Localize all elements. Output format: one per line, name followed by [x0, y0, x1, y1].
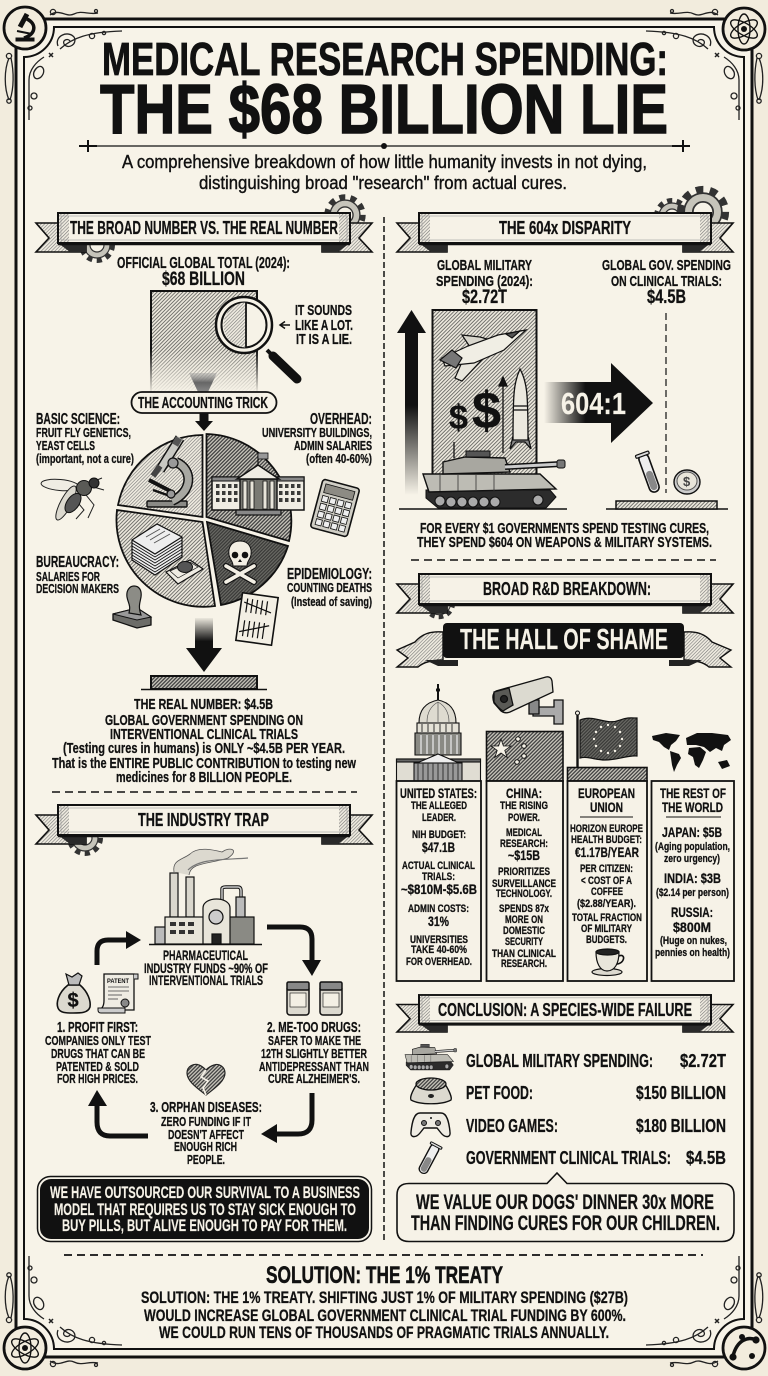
panel: european union: < COST OF A: [581, 875, 632, 887]
step 1 text: 1. PROFIT FIRST:: [57, 1020, 138, 1036]
icon: calculator: [310, 479, 360, 537]
icon: surveillance camera: [493, 677, 563, 724]
step 2 text: 12TH SLIGHTLY BETTER: [261, 1046, 367, 1061]
callout: basic science: BASIC SCIENCE:: [36, 411, 120, 428]
step 2 text: 2. ME-TOO DRUGS:: [267, 1020, 361, 1036]
icon: tally sheet: [236, 593, 278, 645]
arrow: 604 to 1 ratio: 604:1: [561, 386, 626, 421]
panel: european union: UNION: [590, 800, 623, 815]
icon: coin: $: [683, 474, 691, 489]
icon: dollar signs: $: [449, 399, 468, 437]
subtitle: A comprehensive breakdown of how little humanity invests in not dying,: [122, 151, 647, 172]
text block: the real number: [52, 697, 357, 786]
arrow: orphan diseases to profit: [88, 1090, 148, 1136]
text block: the real number: (Testing cures in humans) is ONLY ~$4.5B PER YEAR.: [63, 741, 345, 757]
step 3 text: DOESN'T AFFECT: [168, 1127, 244, 1142]
icon: patent scroll: [98, 974, 138, 1013]
icon: coin: [674, 470, 700, 494]
small arrows in military bar: [454, 377, 507, 458]
ground lines: [399, 508, 728, 510]
step 2 text: [259, 1020, 369, 1086]
panel: china: RESEARCH.: [501, 958, 547, 970]
heading: broad number vs real number: [36, 198, 372, 260]
text: pharmaceutical industry funds: [144, 948, 268, 988]
solution: SOLUTION: THE 1% TREATY: [266, 1262, 503, 1289]
callout: basic science: (important, not a cure): [36, 452, 134, 466]
panel: european union: OF MILITARY: [581, 923, 632, 935]
icon: broken heart: [187, 1064, 225, 1095]
bar: clinical trials: [616, 501, 717, 509]
icon: pill bottles: [287, 982, 342, 1015]
panel: china: CHINA:: [506, 786, 542, 801]
panel: european union: €1.17B/YEAR: [575, 844, 639, 860]
panel: china: SURVEILLANCE: [492, 878, 556, 890]
callout: dogs dinner: [397, 1173, 734, 1242]
arrow: industry to me-too drugs: [267, 927, 321, 976]
callout: overhead: (often 40-60%): [306, 452, 372, 466]
label: government clinical spending: ON CLINICAL TRIALS:: [611, 273, 722, 290]
panel: united states: ADMIN COSTS:: [408, 903, 469, 915]
panel: rest of the world: [652, 781, 734, 981]
pill: the accounting trick: [132, 392, 276, 413]
icon: patent scroll: PATENT: [107, 979, 129, 985]
panel: rest of the world: (Huge on nukes,: [660, 935, 727, 947]
icon: game controller: [411, 1113, 450, 1137]
step 1 text: FOR HIGH PRICES.: [57, 1071, 138, 1086]
heading: the 604x disparity: [397, 190, 733, 252]
panel: china: THAN CLINICAL: [492, 948, 556, 960]
panel: united states: [396, 781, 481, 981]
panel: china: [486, 781, 563, 981]
callout: bureaucracy: DECISION MAKERS: [36, 582, 119, 596]
arrow: profit to industry: [97, 931, 141, 965]
row: video games: VIDEO GAMES:: [466, 1116, 558, 1136]
arrow: big down: [186, 618, 222, 672]
panel: china: POWER.: [508, 812, 540, 824]
target line for clinical trials: [665, 313, 667, 493]
text: for every 1 dollar: [417, 520, 712, 551]
official total: [117, 255, 290, 290]
bar: military spending: [432, 310, 536, 478]
label: government clinical spending: $4.5B: [647, 287, 686, 308]
panel: china: MEDICAL: [506, 827, 542, 839]
label: global military spending: SPENDING (2024):: [436, 273, 533, 290]
callout: outsourced survival: WE HAVE OUTSOURCED OUR SURVIVAL TO A BUSINESS: [50, 1184, 360, 1202]
row: pet food: [466, 1083, 726, 1103]
row: pet food: PET FOOD:: [466, 1083, 533, 1103]
callout: overhead: OVERHEAD:: [310, 411, 372, 428]
callout: overhead: UNIVERSITY BUILDINGS,: [262, 426, 372, 440]
icon: dollar signs: [449, 382, 501, 440]
text block: the real number: GLOBAL GOVERNMENT SPENDING ON: [105, 713, 303, 729]
row: video games: $180 BILLION: [636, 1116, 726, 1136]
icon: coffee cup: [592, 949, 624, 976]
panel: united states: FOR OVERHEAD.: [406, 956, 472, 968]
step 3 text: ENOUGH RICH: [174, 1139, 237, 1154]
panel: china: DOMESTIC: [503, 925, 545, 937]
step 1 text: DRUGS THAT CAN BE: [51, 1046, 145, 1061]
icon: skull and crossbones: [226, 541, 254, 582]
icon: pharmaceutical factory: [149, 849, 262, 944]
icon: missile: [510, 369, 531, 449]
icon: money bag: $: [68, 990, 79, 1012]
pie chart: [116, 434, 291, 607]
text: pharmaceutical industry funds: INDUSTRY FUNDS ~90% OF: [144, 961, 268, 976]
heading: broad R&D breakdown: [397, 574, 733, 616]
icon: dollar signs: $: [472, 382, 501, 440]
heading: the industry trap: [36, 805, 372, 853]
icon: paper stack: [132, 524, 182, 575]
panel: rest of the world: pennies on health): [655, 947, 730, 959]
icon: fighter jet: [440, 330, 526, 381]
panel: china: SPENDS 87x: [499, 903, 550, 915]
arrow: up: [397, 310, 426, 495]
panel: china: TECHNOLOGY.: [496, 888, 552, 900]
pill: the accounting trick: THE ACCOUNTING TRICK: [138, 395, 269, 412]
panel: european union: PER CITIZEN:: [580, 863, 633, 875]
callout: sounds like a lot: IT SOUNDS: [295, 302, 352, 319]
panel: china: ~$15B: [508, 847, 540, 863]
icon: microscope: [147, 438, 188, 507]
step 2 text: ANTIDEPRESSANT THAN: [259, 1059, 369, 1074]
column divider: [383, 217, 385, 1240]
row: global military spending: GLOBAL MILITARY SPENDING:: [466, 1051, 653, 1071]
step 3 text: ZERO FUNDING IF IT: [161, 1114, 251, 1129]
callout: epidemiology: COUNTING DEATHS: [287, 581, 372, 595]
icon: small tank: [405, 1044, 457, 1070]
icon: atom medallion top: [723, 8, 765, 50]
heading: broad number vs real number: THE BROAD NUMBER VS. THE REAL NUMBER: [70, 217, 338, 238]
icon: EU flag: [576, 711, 637, 767]
subtitle: [122, 151, 647, 193]
callout: outsourced survival: [38, 1176, 372, 1242]
bar: 68 billion with fade: [149, 291, 259, 395]
callout: basic science: FRUIT FLY GENETICS,: [36, 426, 131, 440]
icon: atom medallion bottom: [4, 1327, 46, 1369]
callout: epidemiology: (Instead of saving): [291, 595, 372, 609]
label: global military spending: [436, 257, 533, 308]
panel: european union: TOTAL FRACTION: [572, 912, 642, 924]
callout: outsourced survival: BUY PILLS, BUT ALIVE ENOUGH TO PAY FOR THEM.: [62, 1217, 347, 1235]
panel: european union: EUROPEAN: [578, 786, 635, 801]
arrow: down to pie: [195, 413, 213, 431]
panel: european union: HORIZON EUROPE: [570, 823, 643, 835]
panel: united states: ACTUAL CLINICAL: [402, 860, 475, 872]
panel: rest of the world: $800M: [673, 919, 711, 935]
callout: basic science: YEAST CELLS: [36, 439, 95, 453]
icon: money bag: [57, 973, 90, 1013]
panel: united states: UNITED STATES:: [400, 786, 477, 801]
panel: european union: BUDGETS.: [586, 934, 627, 946]
step 3 text: 3. ORPHAN DISEASES:: [150, 1100, 262, 1116]
text: pharmaceutical industry funds: INTERVENTIONAL TRIALS: [149, 973, 263, 988]
panel: united states: $47.1B: [422, 839, 455, 855]
solution: WE COULD RUN TENS OF THOUSANDS OF PRAGMATIC TRIALS ANNUALLY.: [159, 1323, 609, 1342]
icon: world map: [652, 733, 731, 772]
step 1 text: COMPANIES ONLY TEST: [45, 1033, 151, 1048]
heading: the industry trap: THE INDUSTRY TRAP: [138, 809, 269, 830]
step 3 text: PEOPLE.: [187, 1152, 225, 1167]
callout: epidemiology: EPIDEMIOLOGY:: [287, 566, 372, 583]
panel: rest of the world: zero urgency): [664, 853, 720, 865]
subtitle: distinguishing broad "research" from actual cures.: [199, 172, 567, 193]
panel: china: THE RISING: [500, 800, 548, 812]
icon: small test tube: [416, 1142, 442, 1176]
panel: european union: HEALTH BUDGET:: [571, 834, 642, 846]
panel: united states: 31%: [428, 913, 449, 929]
icon: pet food bowl: [411, 1078, 451, 1104]
text block: the real number: INTERVENTIONAL CLINICAL TRIALS: [110, 727, 298, 743]
text: pharmaceutical industry funds: PHARMACEUTICAL: [163, 948, 248, 963]
icon: fruit fly: [41, 478, 104, 522]
panel: rest of the world: INDIA: $3B: [664, 870, 721, 886]
row: global military spending: $2.72T: [680, 1051, 726, 1071]
callout: sounds like a lot: [280, 302, 353, 348]
row: government clinical trials: $4.5B: [686, 1148, 726, 1168]
panel: china: MORE ON: [505, 914, 543, 926]
callout: bureaucracy: [36, 554, 119, 596]
arrow: 604 to 1 ratio: [544, 363, 653, 443]
row: video games: [466, 1116, 726, 1136]
callout: sounds like a lot: IT IS A LIE.: [296, 331, 352, 348]
heading banner: the hall of shame: THE HALL OF SHAME: [460, 624, 668, 656]
heading: conclusion: [397, 995, 733, 1032]
arrow: me-too drugs to orphan diseases: [261, 1093, 312, 1143]
row: government clinical trials: GOVERNMENT CLINICAL TRIALS:: [466, 1148, 671, 1168]
icon: main battle tank: [423, 451, 565, 508]
callout: overhead: [262, 411, 372, 466]
panel: rest of the world: THE REST OF: [660, 786, 726, 801]
step 3 text: [150, 1100, 262, 1167]
panel: european union: [568, 768, 647, 981]
panel: united states: LEADER.: [422, 812, 456, 824]
icon: US capitol: [396, 684, 480, 781]
icon: microscope medallion: [4, 7, 46, 49]
title: [100, 33, 668, 148]
row: pet food: $150 BILLION: [636, 1083, 726, 1103]
official total: $68 BILLION: [162, 268, 245, 290]
text block: the real number: medicines for 8 BILLION PEOPLE.: [116, 770, 292, 786]
callout: epidemiology: [287, 566, 372, 609]
callout: outsourced survival: MODEL THAT REQUIRES US TO STAY SICK ENOUGH TO: [54, 1201, 356, 1219]
icon: magnifying glass: [216, 297, 297, 379]
step 1 text: [45, 1020, 151, 1086]
heading banner: the hall of shame: [397, 623, 731, 667]
panel: rest of the world: JAPAN: $5B: [662, 824, 722, 840]
step 1 text: PATENTED & SOLD: [56, 1059, 139, 1074]
icon: stamp on pad: [166, 560, 203, 584]
icon: molecule medallion: [723, 1327, 765, 1369]
step 2 text: CURE ALZHEIMER'S.: [268, 1071, 360, 1086]
label: global military spending: GLOBAL MILITARY: [437, 257, 532, 274]
panel: european union: ($2.88/YEAR).: [577, 898, 636, 910]
panel: european union: COFFEE: [591, 886, 623, 898]
solution: [141, 1262, 628, 1342]
icon: university building: [212, 453, 304, 515]
heading: broad R&D breakdown: BROAD R&D BREAKDOWN:: [483, 578, 651, 599]
panel: united states: TRIALS:: [422, 871, 455, 883]
label: global military spending: $2.72T: [462, 287, 507, 308]
panel: rest of the world: THE WORLD: [662, 800, 723, 815]
panel: china: SECURITY: [505, 936, 543, 948]
text block: the real number: That is the ENTIRE PUBLIC CONTRIBUTION to testing new: [52, 756, 357, 772]
panel: china: RESEARCH:: [500, 838, 548, 850]
text block: the real number: THE REAL NUMBER: $4.5B: [134, 697, 273, 713]
label: government clinical spending: [602, 257, 731, 308]
bar: real number 4.5B: [141, 676, 267, 690]
panel: rest of the world: (Aging population,: [655, 841, 730, 853]
panel: rest of the world: RUSSIA:: [671, 904, 713, 920]
panel: united states: NIH BUDGET:: [412, 829, 466, 841]
step 2 text: SAFER TO MAKE THE: [268, 1033, 361, 1048]
panel: rest of the world: ($2.14 per person): [656, 887, 729, 899]
title divider: [79, 140, 690, 152]
callout: bureaucracy: BUREAUCRACY:: [36, 554, 119, 571]
panel: united states: ~$810M-$5.6B: [401, 881, 477, 897]
icon: rubber stamp: [113, 586, 151, 628]
icon: china flag: [486, 732, 563, 781]
official total: OFFICIAL GLOBAL TOTAL (2024):: [117, 255, 290, 272]
callout: bureaucracy: SALARIES FOR: [36, 570, 100, 584]
panel: united states: TAKE 40-60%: [411, 944, 467, 956]
panel: united states: UNIVERSITIES: [410, 934, 468, 946]
panel: china: PRIORITIZES: [498, 866, 550, 878]
callout: overhead: ADMIN SALARIES: [294, 439, 372, 453]
callout: sounds like a lot: LIKE A LOT.: [295, 317, 353, 334]
callout: basic science: [36, 411, 134, 466]
heading: the 604x disparity: THE 604x DISPARITY: [499, 217, 631, 238]
panel: united states: THE ALLEGED: [411, 800, 467, 812]
icon: test tube: [635, 451, 662, 494]
